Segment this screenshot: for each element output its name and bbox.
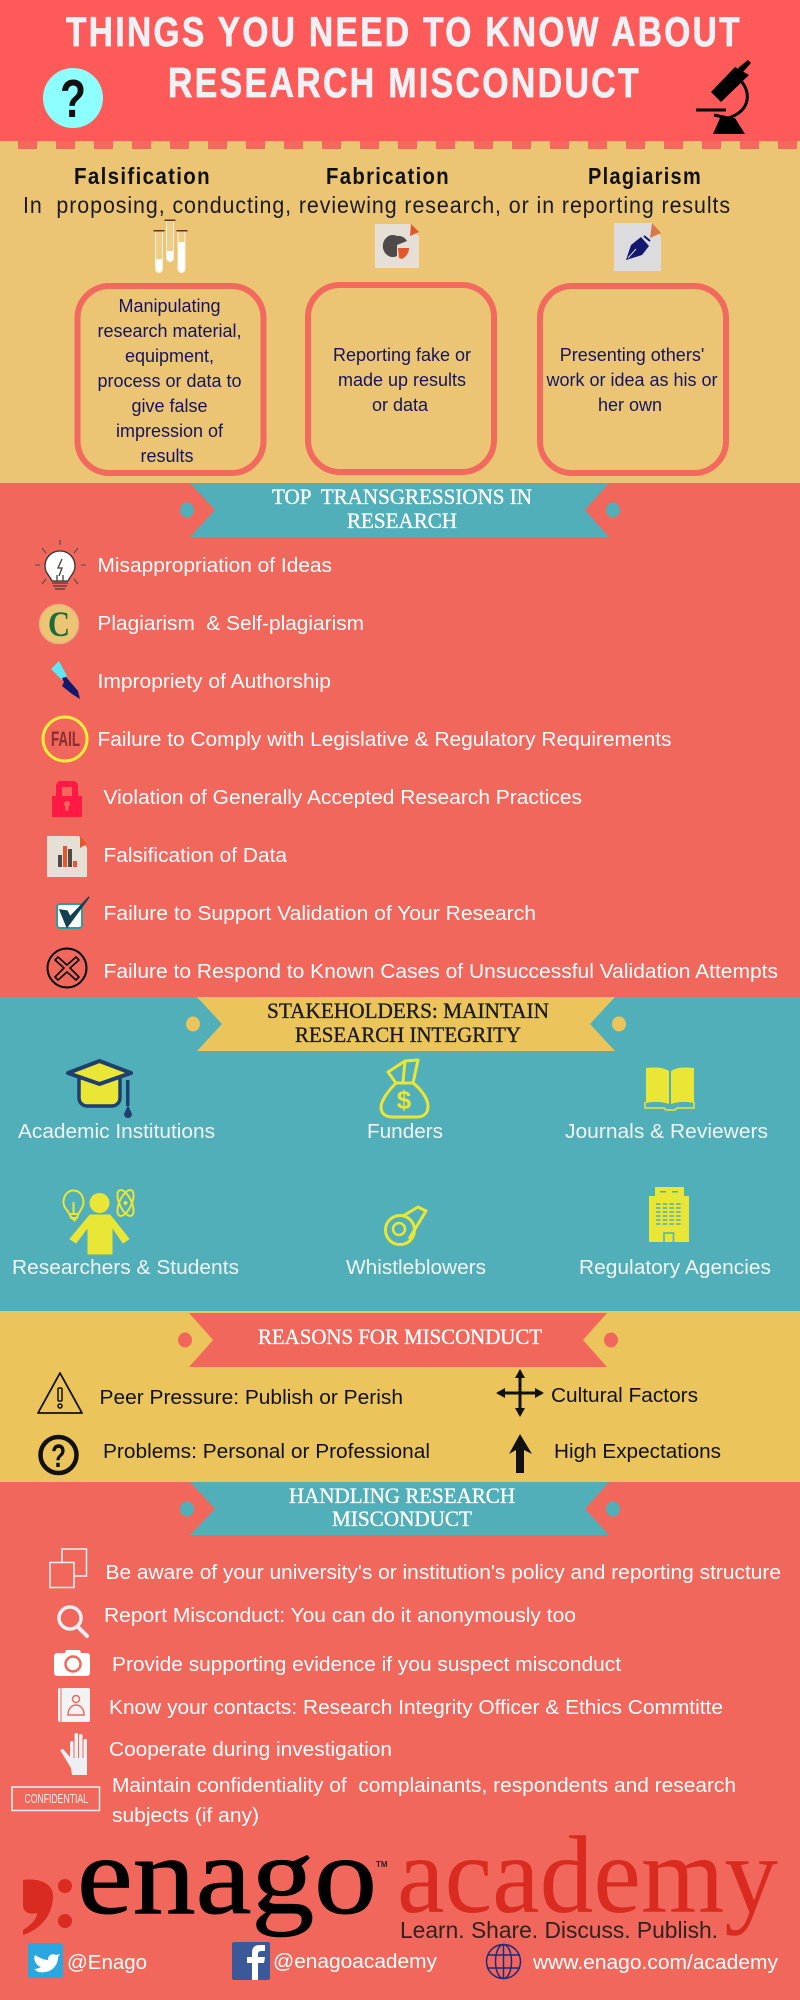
reason: high expectations xyxy=(509,1434,721,1473)
stakeholder: researchers and students xyxy=(12,1188,239,1279)
step: maintain confidentiality: Maintain confidentiality of complainants, respondents and research xyxy=(112,1775,736,1797)
step: report misconduct: Report Misconduct: You can do it anonymously too xyxy=(104,1605,576,1627)
banner: handling: MISCONDUCT xyxy=(332,1506,473,1531)
item: falsification of data xyxy=(47,836,288,877)
step: maintain confidentiality xyxy=(12,1775,736,1827)
logo: enago: enago xyxy=(77,1815,377,1938)
social: facebook xyxy=(232,1942,437,1980)
stakeholder: funders: $ xyxy=(397,1085,412,1115)
icon: pen document xyxy=(614,223,661,271)
reason: problems: Problems: Personal or Professional xyxy=(103,1441,430,1463)
stakeholder: funders: Funders xyxy=(367,1121,443,1143)
definition box: falsification: impression of xyxy=(116,421,224,441)
logo: academy: academy xyxy=(397,1814,778,1936)
banner: top transgressions xyxy=(180,483,620,537)
title xyxy=(66,8,742,106)
icon: microscope xyxy=(696,60,751,134)
stakeholder: academic institutions xyxy=(18,1061,215,1143)
icon: question mark xyxy=(43,68,103,129)
icon: question mark: ? xyxy=(60,69,86,129)
item: failure to support validation: Failure to Support Validation of Your Research xyxy=(104,903,536,925)
reason: high expectations: High Expectations xyxy=(554,1441,721,1463)
stakeholder: whistleblowers xyxy=(346,1207,486,1279)
item: violation of practices: Violation of Generally Accepted Research Practices xyxy=(104,787,582,809)
step: maintain confidentiality: subjects (if any) xyxy=(112,1805,259,1827)
logo: academy: Learn. Share. Discuss. Publish. xyxy=(400,1917,718,1943)
item: failure to respond xyxy=(48,948,778,988)
definition box: falsification: equipment, xyxy=(125,346,214,366)
social: twitter xyxy=(28,1943,147,1978)
icon: test tubes xyxy=(154,220,188,272)
social: twitter: @Enago xyxy=(67,1952,147,1974)
step: maintain confidentiality: CONFIDENTIAL xyxy=(24,1791,88,1806)
definition box: fabrication: or data xyxy=(372,395,429,415)
definition box: falsification: Manipulating xyxy=(118,296,221,316)
item: plagiarism: C xyxy=(48,604,70,644)
definition box: fabrication xyxy=(308,285,494,472)
reason: cultural factors: Cultural Factors xyxy=(551,1385,698,1407)
definition box: fabrication: Reporting fake or xyxy=(333,345,471,365)
reason: cultural factors xyxy=(496,1369,698,1417)
item: plagiarism: Plagiarism & Self-plagiarism xyxy=(98,613,364,635)
panel: reasons for misconduct xyxy=(0,1311,800,1482)
step: be aware: Be aware of your university's or institution's policy and reporting structure xyxy=(106,1562,781,1584)
item: failure to comply xyxy=(43,717,672,761)
reason: problems xyxy=(40,1437,430,1474)
item: misappropriation of ideas: Misappropriation of Ideas xyxy=(98,555,332,577)
stakeholder: academic institutions: Academic Institutions xyxy=(18,1121,215,1143)
item: failure to support validation xyxy=(57,897,536,928)
panel: definitions xyxy=(0,141,800,483)
reason: peer pressure xyxy=(38,1373,403,1413)
item: impropriety of authorship xyxy=(51,661,331,699)
step: report misconduct xyxy=(59,1605,576,1636)
stakeholder: whistleblowers: Whistleblowers xyxy=(346,1257,486,1279)
definition box: falsification xyxy=(78,286,264,473)
stakeholder: journals and reviewers: Journals & Reviewers xyxy=(565,1121,768,1143)
heading: Falsification: Falsification xyxy=(74,163,211,189)
social: facebook: @enagoacademy xyxy=(273,1951,437,1973)
definition box: falsification: research material, xyxy=(97,321,242,341)
stakeholder: researchers and students: Researchers & Students xyxy=(12,1257,239,1279)
item: failure to comply: FAIL xyxy=(51,728,80,751)
definition box: falsification: process or data to xyxy=(97,371,242,391)
social: website: www.enago.com/academy xyxy=(532,1952,778,1974)
reason: problems: ? xyxy=(51,1438,66,1474)
banner: handling: HANDLING RESEARCH xyxy=(289,1483,515,1508)
item: misappropriation of ideas xyxy=(35,540,332,589)
banner: reasons: REASONS FOR MISCONDUCT xyxy=(258,1324,543,1349)
banner: stakeholders xyxy=(186,997,626,1051)
item: failure to comply: Failure to Comply with Legislative & Regulatory Requirements xyxy=(98,729,672,751)
definition box: plagiarism: Presenting others' xyxy=(560,345,704,365)
item: falsification of data: Falsification of Data xyxy=(104,845,288,867)
step: cooperate: Cooperate during investigation xyxy=(109,1739,392,1761)
definition box: plagiarism: work or idea as his or xyxy=(545,370,718,390)
stakeholder: regulatory agencies: Regulatory Agencies xyxy=(579,1257,771,1279)
heading: Fabrication: Fabrication xyxy=(326,163,450,189)
stakeholder: journals and reviewers xyxy=(565,1067,768,1143)
social: website xyxy=(486,1944,778,1978)
step: know contacts xyxy=(58,1688,723,1722)
banner: top transgressions: RESEARCH xyxy=(347,508,457,533)
definition box: falsification: results xyxy=(140,446,194,466)
panel: stakeholders xyxy=(0,997,800,1311)
banner: top transgressions: TOP TRANSGRESSIONS IN xyxy=(272,484,532,509)
step: cooperate xyxy=(60,1733,392,1775)
definition box: fabrication: made up results xyxy=(338,370,466,390)
banner: reasons xyxy=(178,1313,618,1367)
definition box: plagiarism: her own xyxy=(598,395,662,415)
step: provide evidence: Provide supporting evidence if you suspect misconduct xyxy=(112,1654,621,1676)
item: impropriety of authorship: Impropriety of Authorship xyxy=(98,671,331,693)
heading: Plagiarism: Plagiarism xyxy=(588,163,702,189)
icon: pie chart document xyxy=(375,224,419,268)
title: RESEARCH MISCONDUCT xyxy=(168,59,641,106)
reason: peer pressure: Peer Pressure: Publish or Perish xyxy=(100,1387,403,1409)
banner: stakeholders: RESEARCH INTEGRITY xyxy=(295,1022,521,1047)
step: be aware xyxy=(50,1549,781,1588)
banner: handling xyxy=(180,1482,620,1535)
banner: stakeholders: STAKEHOLDERS: MAINTAIN xyxy=(267,998,549,1023)
panel: title header xyxy=(0,0,800,141)
logo: enago: TM xyxy=(376,1860,388,1869)
subheading: In proposing, conducting, reviewing research, or in reporting results xyxy=(23,192,731,218)
item: violation of practices xyxy=(52,781,582,817)
panel: handling research misconduct xyxy=(0,1482,800,2000)
step: know contacts: Know your contacts: Research Integrity Officer & Ethics Commtitte xyxy=(109,1697,723,1719)
definition box: plagiarism xyxy=(540,286,726,473)
stakeholder: funders xyxy=(367,1060,443,1143)
panel: top transgressions xyxy=(0,483,800,997)
stakeholder: regulatory agencies xyxy=(579,1187,771,1279)
item: failure to respond: Failure to Respond to Known Cases of Unsuccessful Validation Attempts xyxy=(104,961,778,983)
definition box: falsification: give false xyxy=(131,396,208,416)
item: plagiarism xyxy=(40,604,364,644)
